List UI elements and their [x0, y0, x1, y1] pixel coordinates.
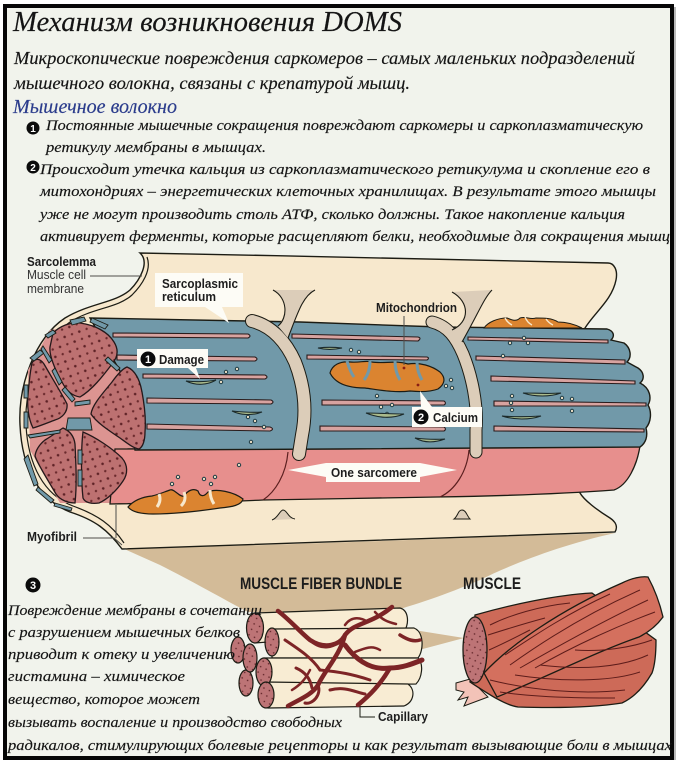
pink backing behind cross sections	[28, 322, 150, 503]
step 2 text	[26, 160, 670, 245]
capillary label: Capillary	[378, 709, 429, 724]
mitochondrion: top right	[484, 317, 582, 328]
label: Sarcoplasmic reticulum	[155, 273, 243, 323]
step 3 text	[7, 578, 672, 754]
label: Sarcolemma: membrane	[27, 281, 84, 296]
muscle striations	[488, 590, 655, 698]
step 2 text: активирует ферменты, которые расщепляют белки, необходимые для сокращения мышц	[40, 229, 670, 245]
label: Calcium: Calcium	[433, 410, 478, 425]
front muscle strap	[484, 577, 663, 697]
label: Mitochondrion: Mitochondrion	[376, 300, 457, 315]
icon: number 3: 3	[30, 580, 36, 592]
label: Damage: Damage	[159, 352, 204, 367]
sarcoplasmic reticulum cross bands	[252, 290, 492, 454]
step 3 text: радикалов, стимулирующих болевые рецепторы и как результат вызывающие боли в мышцах	[7, 738, 672, 754]
step 3 text: вещество, которое может	[8, 692, 200, 708]
step 3 text: гистамина – химическое	[8, 669, 185, 685]
label: Myofibril: Myofibril	[27, 529, 77, 544]
step 1 text: Постоянные мышечные сокращения повреждают саркомеры и саркоплазматическую	[45, 118, 643, 134]
step 1 text: ретикулу мембраны в мышцах.	[45, 140, 266, 156]
heading: muscle: MUSCLE	[463, 574, 521, 593]
mitochondrion: centre	[330, 361, 444, 392]
damage tears	[186, 347, 561, 442]
pink slits	[113, 333, 646, 432]
icon: number 1	[26, 122, 40, 135]
rear muscle belly	[470, 593, 656, 708]
capillary label	[360, 707, 429, 724]
subheading: muscle fibre: Мышечное волокно	[12, 96, 177, 118]
label: Calcium	[412, 391, 482, 427]
label: Damage: 1	[145, 354, 151, 366]
small arches	[272, 510, 470, 520]
intro text: мышечного волокна, связаны с крепатурой мышц.	[13, 73, 410, 93]
title: Механизм возникновения DOMS	[12, 7, 402, 38]
step 2 text: Происходит утечка кальция из саркоплазматического ретикулума и скопление его в	[39, 162, 651, 178]
step 2 text: уже не могут производить столь АТФ, сколько должны. Такое накопление кальция	[38, 207, 625, 223]
icon: number 2	[26, 160, 40, 174]
label: Sarcoplasmic reticulum: reticulum	[162, 289, 216, 304]
label: One sarcomere: One sarcomere	[331, 465, 417, 480]
step 3 text: приводит к отеку и увеличению	[8, 647, 235, 663]
label: Sarcolemma	[27, 254, 97, 296]
muscle fibre illustration	[20, 253, 650, 549]
label: Mitochondrion	[376, 300, 457, 365]
pink myofibril band	[110, 446, 640, 504]
intro text: Микроскопические повреждения саркомеров – самых маленьких подразделений	[13, 48, 635, 68]
tendon	[456, 679, 488, 706]
step 1 text	[26, 118, 643, 156]
fibre end faces	[231, 613, 279, 708]
zoom cone: fibre to bundle	[122, 533, 615, 612]
fibre cylinders	[255, 608, 422, 708]
blue gaps between cross sections	[24, 317, 120, 511]
zoom cone: bundle to muscle	[414, 630, 464, 650]
capillaries	[278, 607, 422, 706]
cross sections of myofibrils	[28, 323, 145, 503]
calcium particles	[170, 336, 574, 486]
icon: number 2: 2	[30, 163, 36, 174]
label: Sarcolemma: Muscle cell	[27, 267, 86, 282]
label: Sarcoplasmic reticulum: Sarcoplasmic	[162, 276, 238, 291]
step 2 text: митохондриях – энергетических клеточных хранилищах. В результате этого мышцы	[39, 184, 656, 200]
heading: muscle fiber bundle: MUSCLE FIBER BUNDLE	[240, 574, 402, 593]
label: Damage	[137, 349, 208, 379]
sarcolemma leader line	[83, 276, 142, 545]
muscle fiber bundle illustration	[231, 607, 429, 724]
label: One sarcomere	[288, 463, 457, 482]
mitochondrion: bottom	[128, 490, 243, 514]
icon: number 1: 1	[30, 124, 36, 135]
step 3 text: вызывать воспаление и производство свободных	[8, 715, 342, 731]
sarcolemma membrane	[20, 253, 617, 549]
blue myofibrils	[90, 318, 650, 450]
muscle cut end	[463, 617, 487, 683]
intro text	[13, 48, 635, 93]
step 3 text: Повреждение мембраны в сочетании	[7, 603, 262, 619]
label: Sarcolemma: Sarcolemma	[27, 254, 97, 269]
step 3 text: с разрушением мышечных белков	[8, 625, 241, 641]
label: Calcium: 2	[418, 412, 424, 424]
muscle illustration	[456, 577, 663, 708]
icon: number 3	[26, 578, 40, 592]
band dividers	[263, 450, 469, 500]
